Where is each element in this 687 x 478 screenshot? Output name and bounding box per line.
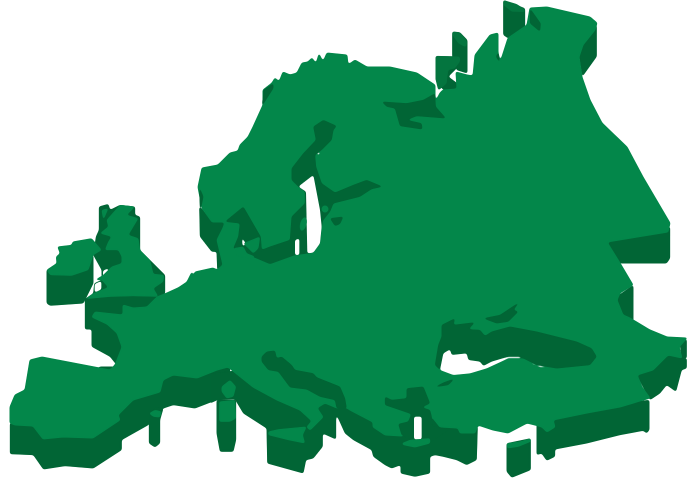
land top: Great Britain and Ireland xyxy=(47,205,164,417)
seas: Baltic, North Sea, Gulf of Bothnia, White Sea xyxy=(199,83,446,264)
seas: Adriatic and Aegean xyxy=(219,351,450,447)
extrusion sides: Scandinavia xyxy=(199,207,227,270)
extrusion sides: Turkey, Caucasus, Cyprus xyxy=(507,338,687,478)
extrusion sides: northern Russia and east edge xyxy=(436,0,670,337)
notches: Novaya Zemlya coast xyxy=(496,8,541,63)
seas: Black Sea, Azov, Marmara; Cyprus top xyxy=(433,302,597,448)
extrusion sides: Mediterranean, Balkans and islands xyxy=(210,367,478,477)
extrusion sides: west (Iberia, Biscay, Britain, Ireland) xyxy=(10,204,230,469)
island: Corsica xyxy=(222,380,236,398)
island: Sardinia xyxy=(219,400,236,422)
island: Crete xyxy=(402,438,430,447)
island: Sicily xyxy=(268,427,307,443)
